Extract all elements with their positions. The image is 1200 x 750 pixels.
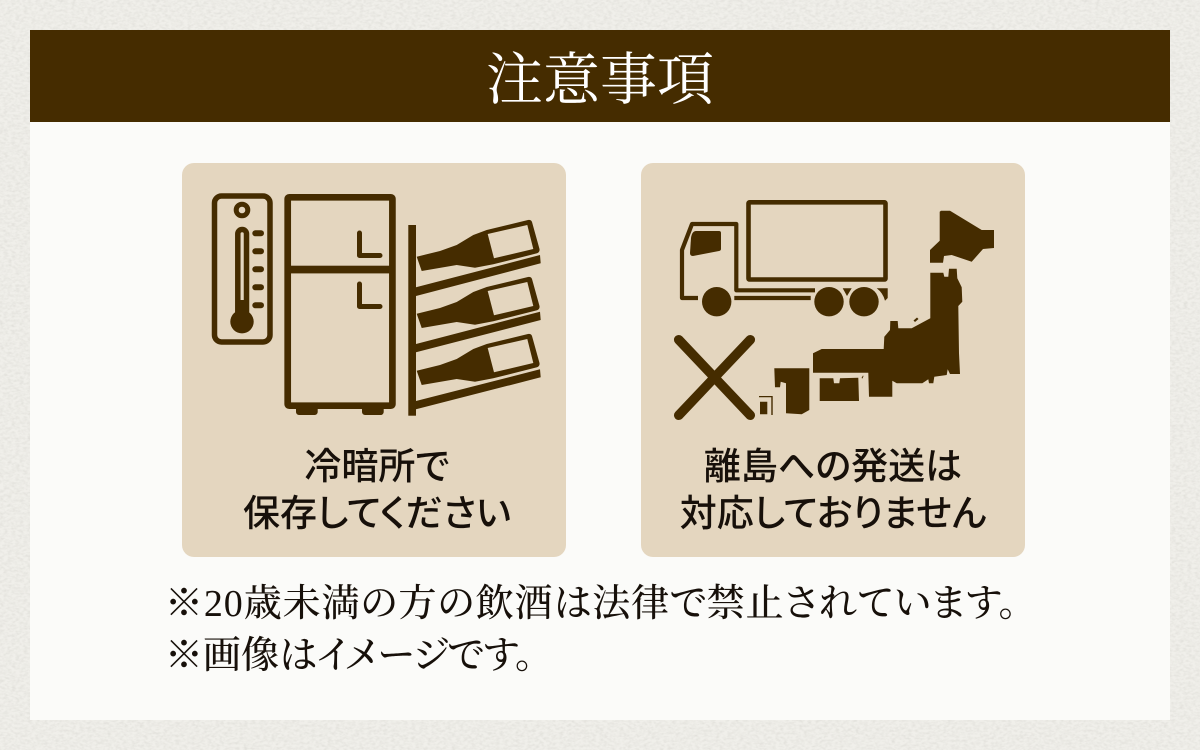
icon: thermometer [214, 196, 270, 342]
Awaji [862, 376, 864, 378]
Sado [914, 318, 918, 322]
Hokkaido [930, 211, 994, 263]
note: legal drinking age: ※20歳未満の方の飲酒は法律で禁止されています。 [165, 583, 1019, 625]
panel: shipping [641, 163, 1025, 557]
icon: wine rack with bottles [408, 220, 541, 416]
note: image disclaimer: ※画像はイメージです。 [165, 635, 534, 677]
caption: shipping [680, 446, 986, 534]
caption: storage: 保存してください [243, 493, 511, 534]
icon: cross mark [679, 340, 750, 415]
caption: shipping: 離島への発送は [704, 446, 962, 487]
caption: shipping: 対応しておりません [680, 493, 986, 534]
Shikoku [820, 378, 859, 401]
caption: storage [243, 446, 511, 534]
content panel [30, 122, 1170, 720]
storage illustration [212, 193, 541, 416]
Honshu and western mainland [813, 269, 962, 397]
Kyushu [774, 368, 809, 414]
icon: truck [682, 202, 888, 316]
panel: storage [182, 163, 566, 557]
title banner [30, 30, 1170, 122]
icon: refrigerator [287, 197, 392, 415]
icon: map of Japan [759, 211, 994, 415]
Small southern island [759, 396, 773, 415]
caption: storage: 冷暗所で [304, 446, 450, 487]
title banner: 注意事項 [486, 49, 714, 112]
shipping illustration [674, 200, 994, 420]
